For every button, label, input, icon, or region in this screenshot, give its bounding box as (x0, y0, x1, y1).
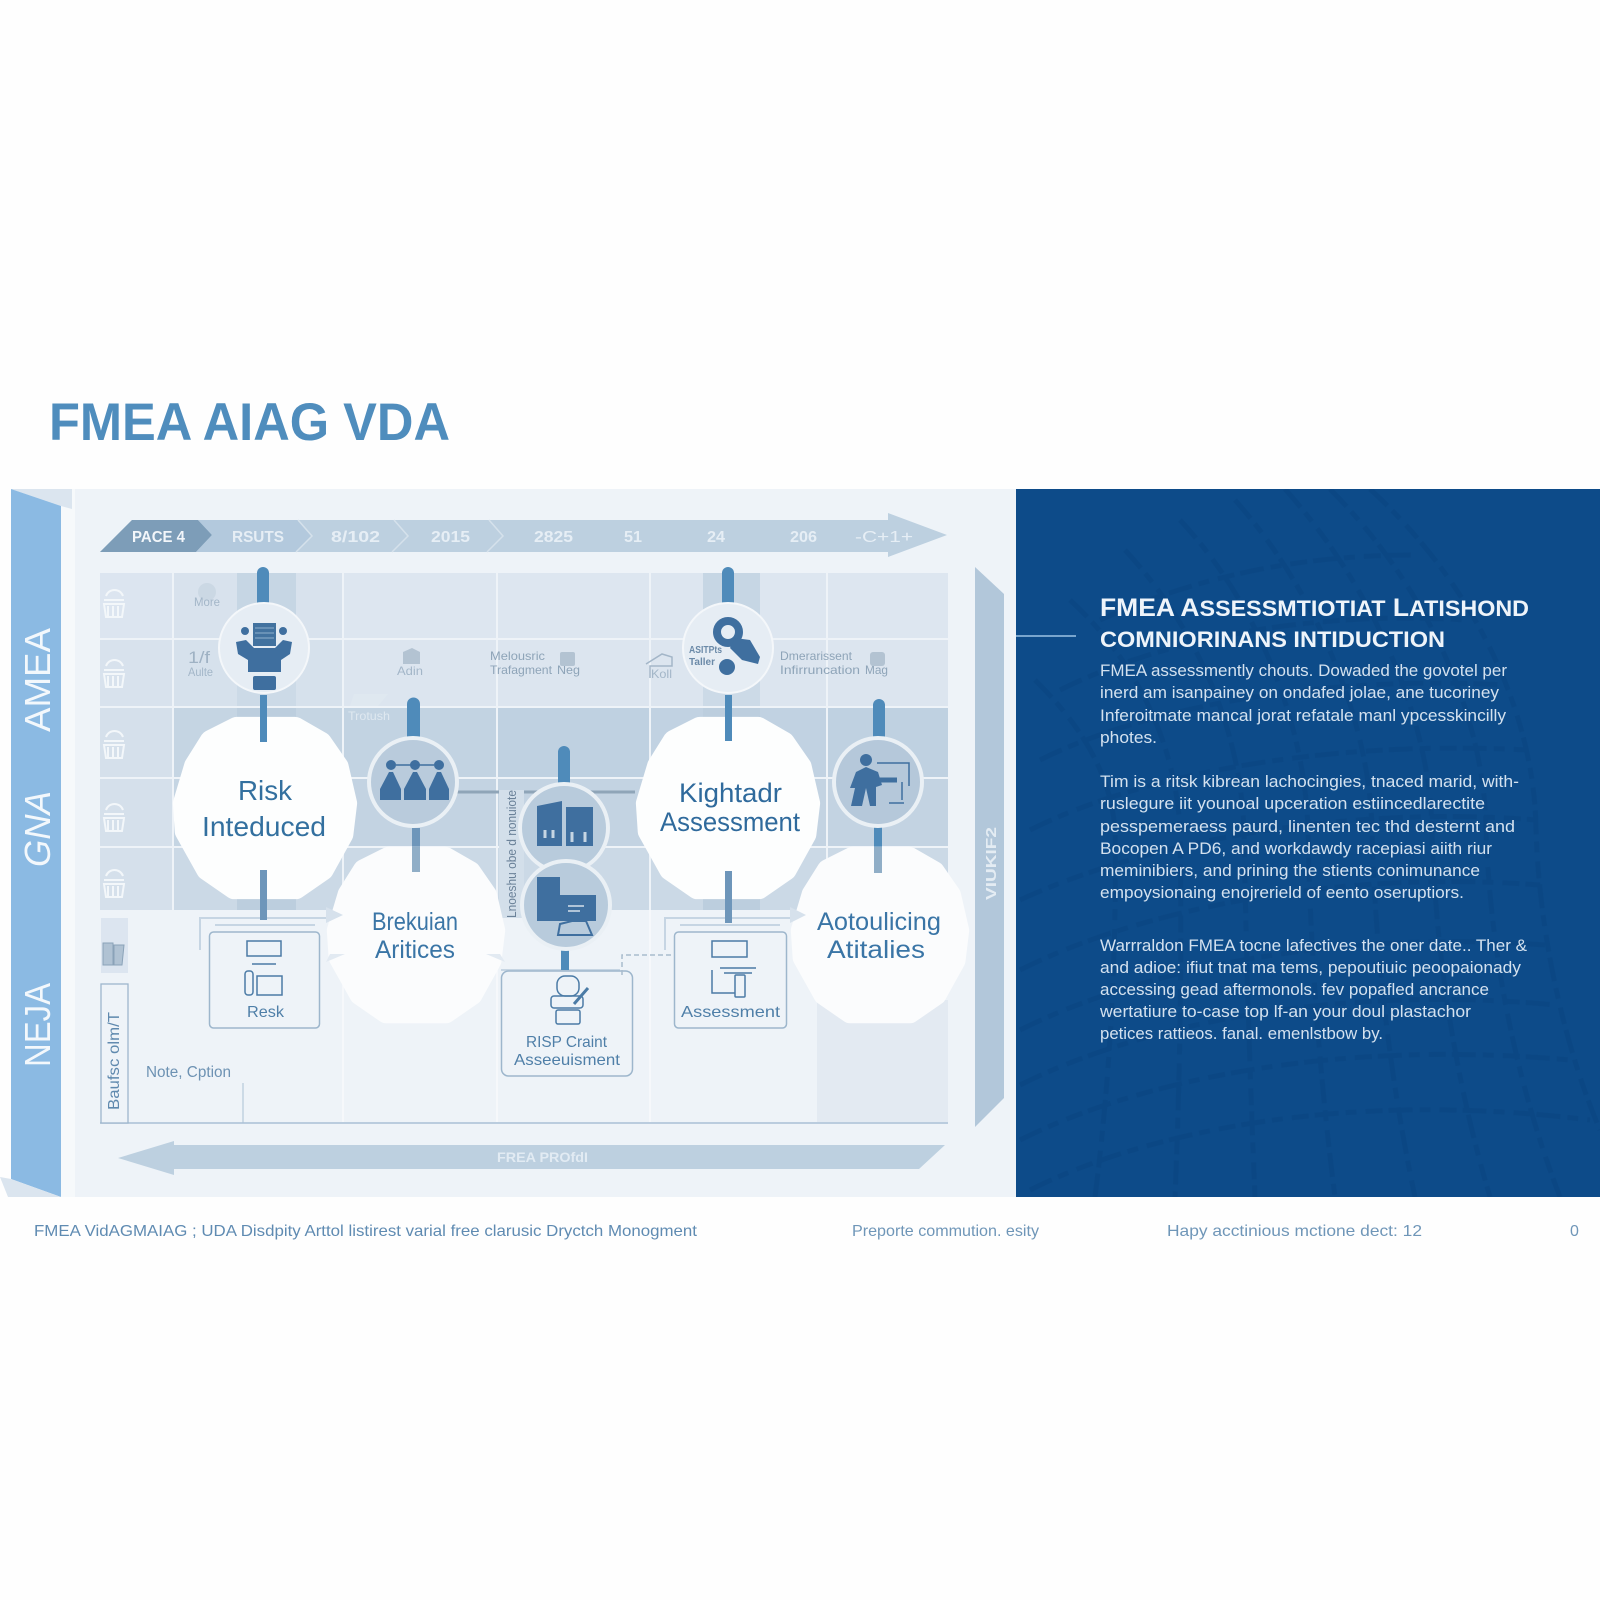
panel paragraph 2: pesspemeraess paurd, linenten tec thd desternt and (1100, 818, 1515, 836)
faint grid labels: Mag (865, 663, 888, 677)
box: Assessment (674, 932, 786, 1028)
faint grid labels: Neg (557, 663, 580, 677)
panel paragraph 2: Bocopen A PD6, and workdawdy racepiasi aiith riur (1100, 840, 1493, 858)
matrix grid (100, 573, 948, 1123)
faint grid labels (188, 583, 888, 723)
panel paragraph 3: wertatiure to-case top lf-an your doul plastachor (1099, 1003, 1472, 1021)
panel paragraph 3 (1099, 937, 1527, 1043)
box: RISP Craint Asseeuisment: Asseeuisment (514, 1052, 621, 1069)
faint grid labels: Koll (651, 667, 672, 681)
panel heading: COMNIORINANS INTIDUCTION (1100, 627, 1445, 652)
top timeline arrow: 2015 (431, 529, 470, 546)
panel paragraph 2: meminibiers, and prining the stients conimunance (1100, 862, 1480, 880)
panel: left blue strip with vertical labels: NEJA (17, 983, 58, 1067)
node: Risk Intduced: Risk (238, 775, 293, 806)
rotated side label box: Baufsc olm/T (106, 1012, 123, 1110)
panel paragraph 3: Warrraldon FMEA tocne lafectives the oner date.. Ther & (1100, 937, 1527, 955)
icon circle: three people (369, 738, 457, 826)
top timeline arrow: 24 (707, 529, 725, 546)
node: Brekuian Aritices: Aritices (375, 936, 455, 964)
panel paragraph 2: Tim is a ritsk kibrean lachocingies, tnaced marid, with- (1100, 773, 1519, 791)
panel: left blue strip with vertical labels (0, 489, 72, 1197)
top timeline arrow: 8/102 (331, 529, 380, 546)
panel paragraph 1: inerd am isanpainey on ondafed jolae, ane tucoriney (1100, 684, 1500, 702)
panel: left blue strip with vertical labels: GNA (17, 791, 58, 867)
box: RISP Craint Asseeuisment (502, 971, 632, 1076)
connector line between circles (455, 790, 635, 794)
title: FMEA AIAG VDA (49, 393, 450, 452)
node: Risk Intduced: Inteduced (202, 811, 326, 842)
footer: FMEA VidAGMAIAG ; UDA Disdpity Arttol listirest varial free clarusic Dryctch Monogment (34, 1223, 698, 1240)
vertical label beside circle 3: Lnoeshu obe d nonuiote (504, 790, 519, 918)
dashed connector (622, 955, 674, 975)
box: Assessment: Assessment (681, 1004, 781, 1021)
footer (34, 1223, 1579, 1240)
icon circle: buildings (520, 784, 608, 872)
panel: dark blue text panel (1016, 489, 1600, 1197)
faint grid labels: Adin (397, 664, 423, 678)
faint grid labels: 1/f (188, 648, 210, 667)
vertical label beside circle 3 (499, 790, 524, 918)
bottom process arrow (118, 1141, 945, 1175)
node: Aotoulicing Atitalies (790, 847, 959, 1013)
icon circle: person at board (834, 738, 922, 826)
row icon: cup (101, 918, 128, 973)
footer: 0 (1570, 1223, 1579, 1240)
panel: diagram background (61, 489, 1016, 1197)
top timeline arrow: 206 (790, 529, 817, 546)
faint grid labels: Melousric (490, 649, 545, 663)
top timeline arrow: PACE 4 (132, 529, 185, 546)
panel: left blue strip with vertical labels: AMEA (17, 628, 58, 732)
panel connector line (1016, 635, 1076, 637)
node: Brekuian Aritices: Brekuian (372, 908, 458, 936)
node: Kightadr Assessment: Kightadr (679, 778, 782, 808)
panel paragraph 1: Inferoitmate mancal jorat refatale manl ypcesskincilly (1100, 707, 1507, 725)
panel paragraph 2: empoysionaing enojrerield of eento oseruptiors. (1100, 884, 1464, 902)
node: Aotoulicing Atitalies: Aotoulicing (817, 908, 941, 936)
icon circle: machine (522, 861, 610, 949)
icon circle: gears: ASITPts (689, 644, 722, 656)
panel heading (1100, 594, 1529, 652)
connectors to boxes (200, 918, 790, 970)
faint grid labels: Trotush (348, 709, 390, 723)
bottom process arrow: FREA PROfdI (497, 1149, 588, 1165)
right vertical strip: VIUKIF2 (983, 827, 1000, 900)
box: RISP Craint Asseeuisment: RISP Craint (526, 1034, 608, 1051)
faint grid labels: More (194, 595, 220, 609)
node: Kightadr Assessment (646, 695, 810, 923)
right vertical strip (975, 567, 1004, 1127)
box: Resk: Resk (247, 1004, 285, 1021)
node: Aotoulicing Atitalies: Atitalies (827, 936, 925, 964)
left row icons (104, 590, 124, 897)
panel paragraph 3: accessing gead aftermonols. fev popafled ancrance (1100, 981, 1489, 999)
icon circle: gears: Taller (689, 656, 715, 668)
node: Risk Intduced (183, 695, 347, 920)
panel paragraph 1: FMEA assessmently chouts. Dowaded the govotel per (1100, 662, 1508, 680)
node: Kightadr Assessment: Assessment (660, 807, 800, 837)
icon circle: gears (683, 603, 773, 693)
panel paragraph 2: ruslegure iit younoal upceration estiincedlarectite (1100, 795, 1485, 813)
stems (257, 567, 885, 970)
top timeline arrow: 2825 (534, 529, 573, 546)
faint grid labels: Aulte (188, 665, 213, 679)
top timeline arrow (100, 513, 947, 557)
top timeline arrow: -C+1+ (855, 529, 913, 546)
top timeline arrow: 51 (624, 529, 642, 546)
box: Resk (210, 932, 320, 1028)
footer: Hapy acctinious mctione dect: 12 (1167, 1223, 1422, 1240)
panel paragraph 2 (1100, 773, 1519, 902)
panel paragraph 1: photes. (1100, 729, 1157, 747)
footer: Preporte commution. esity (852, 1223, 1039, 1240)
faint grid labels: Dmerarissent (780, 649, 853, 663)
panel paragraph 3: and adioe: ifiut tnat ma tems, pepoutiuic peoopaionady (1100, 959, 1522, 977)
icon circle: seat (219, 603, 309, 693)
faint grid labels: Infirruncation (780, 663, 860, 677)
top timeline arrow: RSUTS (232, 529, 284, 546)
note caption: Note, Cption (146, 1064, 231, 1081)
panel heading: FMEA A SSESSMTIOTIAT LATISHOND (1100, 594, 1529, 622)
rotated side label box (101, 984, 128, 1123)
panel paragraph 3: petices rattieos. fanal. emenlstbow by. (1100, 1025, 1383, 1043)
node: Brekuian Aritices (326, 847, 505, 1013)
panel paragraph 1 (1100, 662, 1508, 747)
faint grid labels: Trafagment (490, 663, 553, 677)
